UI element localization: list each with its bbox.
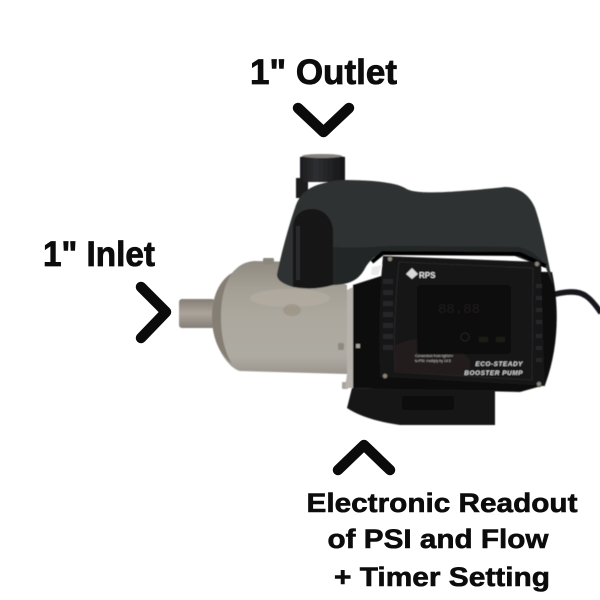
hood rounded lug	[293, 209, 333, 289]
white gap glint	[371, 265, 382, 275]
motor end	[353, 270, 557, 392]
product name: ECO-STEADY	[475, 361, 523, 368]
RPS logo	[406, 268, 436, 280]
panel side ribs	[383, 279, 542, 362]
power button	[461, 333, 469, 341]
display window	[417, 285, 511, 354]
arrow: outlet chevron	[298, 108, 349, 132]
pump illustration	[179, 154, 600, 425]
label: readout: of PSI and Flow	[328, 524, 550, 554]
stainless steel body	[212, 258, 353, 389]
black hood	[277, 180, 553, 289]
label: readout: Electronic Readout	[306, 488, 578, 518]
conversion note: Conversion from kgf/cm²	[415, 354, 454, 358]
RPS logo: RPS	[419, 271, 436, 280]
power cable	[548, 292, 600, 313]
label: inlet: 1" Inlet	[43, 235, 155, 274]
arrow: inlet chevron	[141, 287, 166, 338]
end ring	[345, 287, 353, 388]
inlet shaft	[179, 299, 215, 328]
base foot	[347, 388, 495, 425]
label: readout	[306, 488, 578, 592]
display digits: 88.88	[438, 302, 480, 318]
panel screws	[382, 256, 542, 387]
arrow: readout chevron	[338, 445, 390, 470]
label: outlet: 1" Outlet	[250, 53, 397, 92]
panel gap shadow	[372, 253, 546, 266]
outlet fitting	[296, 154, 345, 198]
small keys	[479, 337, 488, 342]
label: readout: + Timer Setting	[334, 562, 550, 592]
electronic control panel: to PSI: multiply by 14.5	[415, 359, 451, 363]
hood lower shading	[333, 246, 550, 285]
electronic control panel: BOOSTER PUMP	[464, 370, 523, 377]
electronic control panel	[379, 256, 545, 387]
panel glass	[394, 262, 533, 380]
